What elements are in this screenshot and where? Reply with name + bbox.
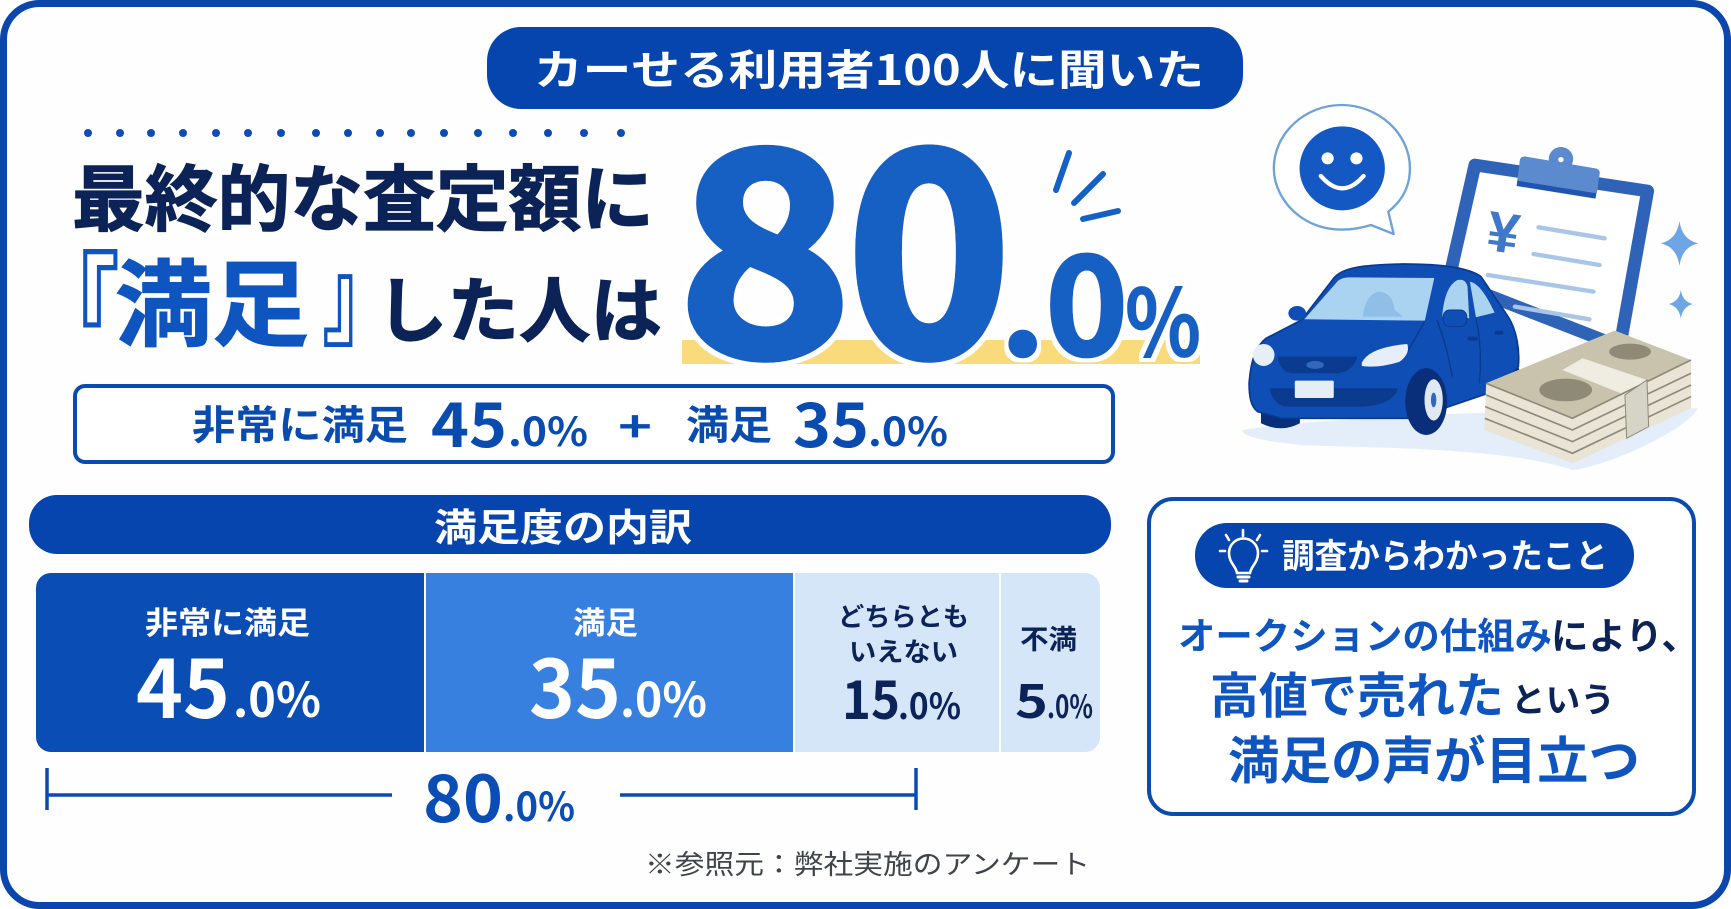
illustration: car, clipboard and money (1242, 105, 1698, 470)
sum box: 45 (431, 378, 507, 465)
section heading: breakdown (29, 495, 1111, 554)
findings message: という (1511, 673, 1615, 722)
segment: satisfied: 満足 (573, 598, 638, 643)
segment: very satisfied: .0% (233, 661, 321, 731)
segment: very satisfied: 非常に満足 (145, 598, 310, 643)
panel: findings (1149, 499, 1699, 814)
segment: satisfied (426, 573, 793, 752)
segment: dissatisfied: .0% (1047, 682, 1093, 728)
sum box: + (618, 394, 652, 455)
sum box: .0% (868, 400, 948, 458)
segment: neutral (795, 573, 999, 752)
sum box: 非常に満足 (192, 393, 408, 451)
ground shadow (1242, 408, 1698, 470)
icon: clipboard with yen estimate (1449, 147, 1648, 347)
icon: clipboard with yen estimate: ¥ (1483, 200, 1524, 267)
headline line 2 remainder: した人は (376, 255, 662, 357)
big number 80.0%: .0 (1000, 200, 1128, 394)
icon: light bulb (1220, 530, 1267, 581)
segment: dissatisfied: 不満 (1020, 618, 1077, 657)
sum box (75, 378, 1113, 465)
80% range bracket (47, 749, 916, 841)
stacked bar chart (36, 573, 1100, 752)
findings heading pill (1195, 523, 1634, 588)
segment: dissatisfied (1001, 573, 1100, 752)
findings message: により、 (1551, 606, 1699, 660)
emphasis sparks (1056, 153, 1118, 219)
findings message: オークションの仕組み (1178, 606, 1552, 660)
dotted rule (84, 129, 625, 137)
top pill: survey label: カーせる利用者100人に聞いた (534, 37, 1204, 98)
segment: neutral: どちらとも (838, 597, 969, 634)
segment: neutral: .0% (898, 678, 961, 730)
segment: satisfied: .0% (620, 661, 707, 731)
big number 80.0% (678, 37, 1201, 434)
icon: blue car (1249, 264, 1522, 435)
80% range bracket: 80 (423, 749, 503, 841)
icon: stack of banknotes (1484, 331, 1691, 463)
source note: ※参照元：弊社実施のアンケート (645, 843, 1090, 882)
headline line 2 emphasis (28, 209, 398, 384)
headline (28, 141, 662, 384)
big number 80.0%: % (1125, 250, 1201, 383)
segment: neutral: 15 (842, 659, 900, 734)
icon: speech bubble with smiley (1274, 105, 1410, 234)
findings heading pill: 調査からわかったこと (1282, 529, 1608, 578)
sum box: 35 (793, 378, 869, 465)
big number 80.0%: 0 (847, 37, 1011, 434)
section heading: breakdown: 満足度の内訳 (434, 497, 692, 552)
findings message: 高値で売れた (1210, 657, 1504, 728)
80% range bracket: .0% (503, 775, 575, 833)
icon: sparkles (1660, 221, 1698, 319)
headline line 2 emphasis: 『 (28, 213, 120, 384)
sum box: 満足 (686, 393, 772, 451)
top pill: survey label (487, 27, 1243, 109)
segment: neutral: いえない (849, 632, 958, 669)
segment: very satisfied (36, 573, 424, 752)
findings message (1178, 606, 1699, 794)
big number 80.0%: 8 (678, 37, 852, 434)
findings message: 満足の声が目立つ (1228, 720, 1640, 794)
headline line 2 emphasis: 満足 (115, 230, 309, 366)
segment: satisfied: 35 (529, 626, 621, 742)
headline line 1: 最終的な査定額に (72, 141, 654, 246)
segment: dissatisfied: 5 (1015, 666, 1048, 732)
headline line 2 emphasis: 』 (322, 209, 398, 369)
segment: very satisfied: 45 (136, 626, 230, 742)
sum box: .0% (508, 400, 588, 458)
